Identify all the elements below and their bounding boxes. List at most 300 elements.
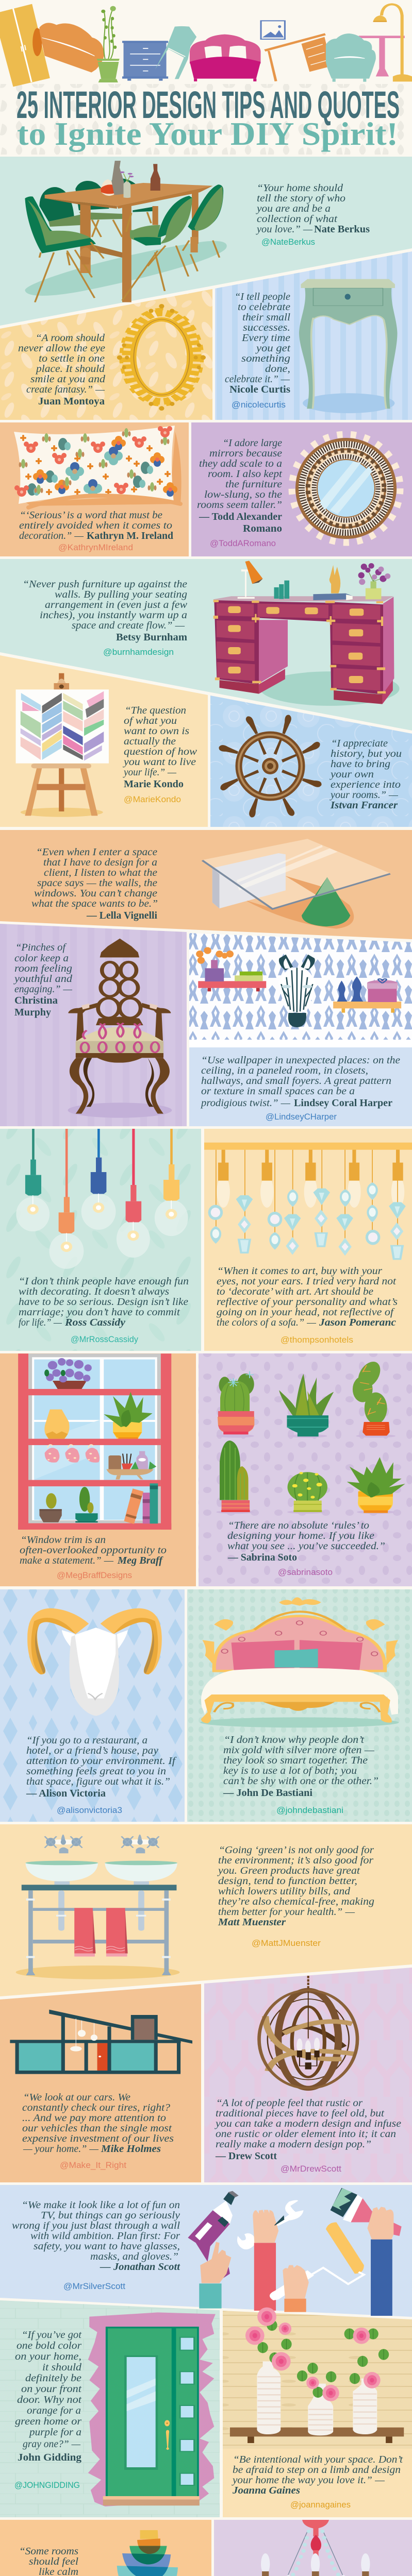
- panel background: [0, 830, 412, 939]
- quote: space says — the walls, the: [37, 877, 157, 889]
- quote: [23, 579, 187, 643]
- quote: — Alison Victoria: [26, 1788, 106, 1799]
- panel background: [0, 655, 208, 827]
- icon: sunburst mirror: [292, 434, 400, 543]
- quote: definitely be: [25, 2372, 81, 2384]
- quote: their small: [242, 312, 290, 323]
- panel: Bunny Williams chandelier: [214, 2520, 412, 2576]
- quote: what the space wants to be.”: [31, 898, 158, 909]
- panel background: [0, 289, 212, 420]
- panel background: [0, 1589, 185, 1822]
- panel: Matt Muenster sinks: [0, 1824, 412, 1996]
- quote: done,: [265, 363, 290, 375]
- panel: Nicole Curtis nightstand: [215, 251, 412, 420]
- icon: drill: [188, 2191, 239, 2278]
- quote: going on in your head, not reflective of: [217, 1307, 395, 1318]
- icon: flower vase shelf: [196, 947, 266, 991]
- quote: actually the: [124, 736, 176, 747]
- quote: “Some rooms: [19, 2546, 78, 2557]
- panel: Mike Holmes modern house: [0, 1984, 201, 2182]
- quote: you are and be a: [256, 203, 331, 214]
- panel: Kathryn M. Ireland pillow: [0, 422, 189, 556]
- icon: paint brush: [331, 2188, 402, 2236]
- panel: Christina Murphy chair: [0, 924, 187, 1126]
- quote: Betsy Burnham: [116, 632, 187, 643]
- icon: yellow lidded pot: [44, 1410, 70, 1439]
- quote: Istvan Francer: [330, 800, 398, 811]
- quote: [329, 738, 402, 811]
- icon: gilded bed: [200, 1597, 399, 1727]
- quote: our vehicles than the single most: [22, 2123, 172, 2134]
- quote: [217, 1844, 374, 1928]
- quote: really make a modern design pop.”: [216, 2139, 371, 2150]
- quote: ... And we pay more attention to: [22, 2112, 166, 2124]
- quote: windows. You can’t change: [34, 888, 157, 899]
- wallpaper background: [189, 933, 412, 1040]
- handle: @KathrynMIreland: [58, 543, 133, 552]
- icon: zebra head: [278, 955, 316, 1027]
- quote: they’re also chemical-free, making: [218, 1896, 374, 1907]
- illustration: dining table set: [25, 161, 227, 302]
- panel background: [199, 1353, 412, 1586]
- quote: Ross Cassidy: [64, 1317, 126, 1328]
- quote: have to bring: [331, 758, 390, 770]
- quote: space and create flow.” —: [72, 620, 185, 631]
- quote: Mike Holmes: [101, 2143, 161, 2155]
- panel background: [0, 924, 187, 1126]
- quote: “Pinches of: [15, 942, 67, 953]
- quote: hotel, or a friend’s house, pay: [26, 1745, 159, 1756]
- quote: prodigious twist.” —: [200, 1097, 291, 1109]
- quote: room. I also kept: [208, 468, 283, 480]
- panel background: [187, 1589, 412, 1822]
- quote: “I tell people: [235, 291, 290, 302]
- quote: entirely avoided when it comes to: [19, 520, 172, 531]
- quote: “Never push furniture up against the: [23, 579, 187, 590]
- quote: [19, 1276, 189, 1328]
- quote: green home or: [15, 2416, 82, 2427]
- quote: your home the way you love it.” —: [232, 2475, 385, 2486]
- quote: to celebrate: [238, 301, 290, 313]
- quote: “The question: [125, 705, 186, 716]
- icon: blue dresser: [122, 41, 168, 81]
- quote: “I appreciate: [331, 738, 388, 749]
- quote: [12, 2199, 180, 2273]
- icon: colorful chandelier: [252, 2520, 378, 2576]
- panel background: [210, 696, 412, 827]
- panel background: [191, 422, 412, 556]
- quote: Murphy: [14, 1007, 52, 1018]
- handle: @MrDrewScott: [281, 2164, 341, 2174]
- quote: [26, 1735, 177, 1799]
- handle: @MegBraffDesigns: [57, 1570, 132, 1580]
- handle: @MarieKondo: [124, 794, 181, 804]
- quote: constantly check our tires, right?: [22, 2102, 171, 2113]
- quote: which lowers utility bills, and: [218, 1886, 351, 1897]
- quote: Joanna Gaines: [232, 2485, 300, 2496]
- quote: “There are no absolute ‘rules’ to: [228, 1520, 369, 1531]
- quote: [20, 1534, 167, 1566]
- quote: the colors of a sofa.” —: [217, 1317, 317, 1328]
- quote: — John De Bastiani: [223, 1787, 312, 1799]
- quote: something: [241, 353, 290, 364]
- panel: Ross Cassidy pendant bulbs: [0, 1129, 201, 1351]
- icon: wrench: [237, 2200, 304, 2249]
- quote: design, tend to function better,: [218, 1875, 357, 1887]
- panel background: [0, 559, 412, 731]
- header: title area: [0, 4, 412, 155]
- quote: “I don’t know why people don’t: [224, 1734, 365, 1745]
- quote: “A lot of people feel that rustic or: [216, 2097, 363, 2109]
- handle: @MrRossCassidy: [71, 1334, 138, 1344]
- icon: easel with chevron painting: [16, 673, 109, 817]
- icon: floor lamp: [373, 4, 412, 81]
- quote: John Gidding: [18, 2452, 82, 2463]
- panel background: [0, 1984, 201, 2182]
- quote: collection of what: [257, 213, 338, 225]
- quote: place. It should: [35, 363, 105, 375]
- quote: rooms seem taller.”: [197, 499, 282, 511]
- quote: of what you: [124, 715, 177, 726]
- quote: successes.: [243, 322, 290, 333]
- quote: question of how: [124, 746, 197, 757]
- icon: mint armchair: [326, 33, 376, 82]
- quote: or texture in small spaces can be a: [201, 1086, 355, 1097]
- panel: Jonathan Scott tools: [0, 2185, 412, 2317]
- quote: your life.” —: [123, 767, 177, 778]
- panel background: [0, 2185, 412, 2317]
- handle: @sabrinasoto: [278, 1567, 333, 1577]
- quote: orange for a: [27, 2405, 81, 2416]
- quote: decoration.” —: [19, 530, 84, 541]
- panel: Todd Alexander Romano round mirror: [191, 422, 412, 556]
- quote: [19, 510, 174, 541]
- quote: smile at you and: [30, 374, 106, 385]
- quote: it should: [42, 2362, 82, 2373]
- handle: @ToddARomano: [210, 538, 276, 548]
- quote: Nicole Curtis: [229, 384, 290, 395]
- panel background: [0, 2520, 211, 2576]
- quote: hallways, and small foyers. A great pattern: [201, 1075, 391, 1087]
- panel: John Gidding front door: [0, 2300, 220, 2517]
- panel: John De Bastiani bed: [187, 1589, 412, 1822]
- quote: on your home,: [15, 2351, 81, 2362]
- quote: that space, figure out what it is.”: [26, 1776, 170, 1787]
- quote: “I adore large: [223, 437, 282, 449]
- icon: carved high-back chair: [68, 939, 172, 1118]
- icon: hanging bulbs: [17, 1129, 188, 1269]
- icon: pink bed: [190, 35, 261, 81]
- quote: [232, 2454, 403, 2496]
- panel background: [0, 1129, 201, 1351]
- quote: “I don’t think people have enough fun: [19, 1276, 189, 1287]
- panel: Sabrina Soto cacti: [199, 1353, 412, 1586]
- quote: — Drew Scott: [215, 2150, 277, 2162]
- quote: they add scale to a: [199, 458, 282, 469]
- panel: Jason Pomeranc crystal strands: [204, 1129, 412, 1351]
- quote: experience into: [331, 779, 401, 790]
- quote: eyes, not your ears. I tried very hard not: [217, 1276, 397, 1287]
- handle: @nicolecurtis: [232, 400, 286, 410]
- quote: expensive investment of our lives: [22, 2133, 174, 2144]
- panel: Meg Braff window shelves: [0, 1353, 196, 1586]
- icon: hands holding DIY tools: [188, 2188, 402, 2316]
- panel: Alison Victoria ram head: [0, 1589, 185, 1822]
- quote: reflective of your personality and what’s: [217, 1296, 398, 1308]
- panel background: [0, 157, 412, 326]
- icon: violet planter: [44, 1358, 92, 1389]
- quote: [13, 942, 73, 1018]
- quote: — Todd Alexander: [199, 511, 282, 522]
- title line 2: to Ignite Your DIY Spirit!: [17, 115, 398, 152]
- quote: you get: [255, 343, 291, 354]
- icon: campaign desk: [213, 561, 400, 706]
- icon: glass coffee table: [202, 839, 390, 929]
- quote: create fantasy.” —: [26, 384, 105, 395]
- quote: “When it comes to art, buy with your: [217, 1265, 383, 1277]
- icon: mint chair: [155, 26, 196, 79]
- quote: [256, 182, 370, 235]
- quote: walls. By pulling your seating: [55, 589, 187, 600]
- quote: celebrate it.” —: [225, 374, 290, 385]
- quote: door. Why not: [17, 2394, 82, 2405]
- quote: the environment; it’s also good for: [218, 1855, 374, 1866]
- quote box: [189, 1047, 412, 1126]
- quote: purple for a: [28, 2427, 81, 2438]
- icon: green front door: [88, 2312, 216, 2506]
- icon: crystal chandelier strands: [204, 1143, 412, 1260]
- panel background: [0, 422, 189, 556]
- icon: agave in yellow pot: [104, 1392, 153, 1439]
- quote: inches), you instantly warm up a: [40, 609, 187, 621]
- icon: vases with roses: [230, 2308, 404, 2443]
- quote: with wild ambition. Plan first: For: [30, 2230, 180, 2242]
- quote: make a statement.” —: [20, 1555, 114, 1566]
- quote: “Going ‘green’ is not only good for: [219, 1844, 374, 1856]
- quote: room feeling: [14, 963, 72, 974]
- handle: @MrSilverScott: [63, 2281, 125, 2291]
- icon: window with shelves: [18, 1353, 171, 1530]
- quote: for life.” —: [19, 1317, 62, 1328]
- icon: orange desk: [264, 33, 332, 81]
- quote: Marie Kondo: [124, 778, 184, 790]
- panel background: [0, 2300, 220, 2517]
- quote: something feels great to you in: [26, 1766, 166, 1777]
- quote: [227, 1520, 385, 1563]
- quote: “Your home should: [257, 182, 343, 194]
- wall decor: shelves and zebra head: [196, 947, 401, 1027]
- sink faucet: [45, 1835, 83, 1853]
- panel: Nate Berkus dining table: [0, 157, 412, 326]
- panel: Lella Vignelli glass table: [0, 830, 412, 939]
- quote: Christina: [14, 995, 58, 1006]
- icon: mid-century house: [10, 2010, 192, 2074]
- quote: designing your home. If you like: [227, 1530, 374, 1541]
- quote: your rooms.” —: [329, 789, 399, 801]
- icon: floral pillow: [14, 426, 182, 507]
- icon: double sink vanity: [16, 1835, 180, 1979]
- quote: client, I listen to what the: [44, 867, 157, 878]
- handle: @LindseyCHarper: [266, 1112, 337, 1122]
- panel: Lindsey Coral Harper wallpaper: [189, 933, 412, 1126]
- handle: @NateBerkus: [261, 237, 315, 247]
- quote: [225, 291, 291, 395]
- handle: @MattJMuenster: [252, 1938, 321, 1948]
- quote: can’t be shy with one or the other.”: [223, 1775, 378, 1787]
- icon: orb chandelier: [259, 1976, 357, 2088]
- quote: should feel: [29, 2556, 78, 2567]
- quote: Jason Pomeranc: [319, 1317, 396, 1328]
- quote: your own: [329, 769, 374, 780]
- quote: with decorating. It doesn’t always: [19, 1286, 169, 1297]
- quote: mirrors because: [209, 448, 282, 459]
- quote: “We make it look like a lot of fun on: [22, 2199, 180, 2211]
- quote: Kathryn M. Ireland: [87, 530, 174, 541]
- quote: to settle in one: [39, 353, 105, 364]
- quote: [197, 437, 283, 534]
- quote: [18, 332, 106, 407]
- quote: — Lella Vignelli: [86, 910, 157, 921]
- quote: one rustic or older element into it; it can: [216, 2128, 396, 2140]
- quote: ceiling, in a paneled room, in closets,: [201, 1065, 368, 1076]
- quote: tell the story of who: [257, 193, 345, 204]
- quote: you want to live: [123, 756, 196, 768]
- handle: @johndebastiani: [276, 1805, 343, 1815]
- quote: you can take a modern design and infuse: [215, 2118, 401, 2129]
- quote: [31, 846, 158, 921]
- quote: [17, 2546, 79, 2576]
- quote background: [223, 2449, 412, 2517]
- handle: @joannagaines: [290, 2500, 351, 2510]
- quote: want to own is: [124, 725, 189, 737]
- quote: be afraid to step on a limb and design: [233, 2464, 401, 2476]
- icon: wardrobe: [0, 4, 50, 87]
- handle: @Make_It_Right: [60, 2160, 126, 2170]
- quote: arrangement in (even just a few: [45, 599, 187, 611]
- quote: often-overlooked opportunity to: [20, 1545, 167, 1556]
- quote: you love.” —: [256, 224, 313, 235]
- furniture illustration row: [0, 4, 412, 87]
- quote: [200, 1055, 400, 1109]
- quote: color keep a: [14, 953, 69, 964]
- icon: polka dot mugs: [45, 1448, 100, 1463]
- quote: the furniture: [225, 479, 282, 490]
- icon: nested bowls: [117, 2530, 178, 2576]
- icon: gold ornate mirror: [117, 304, 206, 411]
- icon: chess pieces and hat box shelf: [333, 976, 401, 1013]
- panel background: [214, 2520, 412, 2576]
- quote: Matt Muenster: [218, 1917, 286, 1928]
- quote: on your front: [21, 2383, 82, 2395]
- quote: traditional pieces have to feel old, but: [216, 2108, 385, 2119]
- quote: safety, you want to have glasses,: [34, 2241, 180, 2252]
- quote: [223, 1734, 378, 1799]
- icon: paint roller: [270, 2222, 364, 2300]
- quote: “‘Serious’ is a word that must be: [20, 510, 162, 521]
- quote: [22, 2092, 174, 2155]
- quote: — Jonathan Scott: [100, 2261, 180, 2273]
- quote: never allow the eye: [18, 343, 105, 354]
- quote: Juan Montoya: [38, 396, 105, 407]
- icon: framed picture: [261, 21, 285, 39]
- icon: mint nightstand: [299, 279, 398, 413]
- handle: @thompsonhotels: [281, 1335, 353, 1345]
- panel: Marie Kondo easel: [0, 655, 208, 827]
- icon: books: [124, 1483, 158, 1524]
- handle: @alisonvictoria3: [57, 1805, 122, 1815]
- quote: have to be so serious. Design isn’t like: [19, 1296, 188, 1308]
- quote: what you see ... you’ve succeeded.”: [227, 1540, 385, 1552]
- panel: Drew Scott orb chandelier: [204, 1968, 412, 2182]
- icon: pink side table: [359, 36, 405, 76]
- panel background: [204, 1968, 412, 2182]
- quote: engaging.” —: [14, 984, 73, 995]
- quote: “We look at our cars. We: [23, 2092, 130, 2103]
- quote: “Even when I enter a space: [36, 846, 157, 858]
- quote: “If you’ve got: [22, 2329, 82, 2341]
- quote: them better for your health.” —: [218, 1906, 355, 1918]
- icon: tray with candle and diffuser: [106, 1451, 156, 1480]
- icon: ship wheel: [217, 713, 323, 819]
- quote: mix gold with silver more often —: [223, 1744, 375, 1756]
- icon: small cacti in pots: [39, 1487, 98, 1522]
- panel background: [0, 1353, 196, 1586]
- quote: they look so smart together. The: [223, 1755, 368, 1766]
- icon: potted plant: [97, 6, 120, 82]
- white gap: [189, 1040, 412, 1047]
- panel: Istvan Francer ship wheel: [210, 696, 412, 827]
- panel: Juan Montoya mirror: [0, 289, 212, 420]
- panel background: [215, 251, 412, 420]
- handle: @burnhamdesign: [103, 647, 174, 657]
- quote: [123, 705, 197, 790]
- quote: [217, 1265, 398, 1328]
- quote: [215, 2097, 401, 2162]
- panel background: [204, 1129, 412, 1351]
- quote: youthful and: [13, 973, 73, 985]
- quote: low-slung, so the: [204, 489, 282, 500]
- icon: sofa: [32, 23, 104, 73]
- icon: ram skull: [27, 1608, 162, 1716]
- quote: to ‘decorate’ with art. Art should be: [217, 1286, 373, 1297]
- wood wall background: [223, 2311, 412, 2449]
- quote: wrong if you just blast through a wall: [12, 2220, 180, 2231]
- quote: “If you go to a restaurant, a: [26, 1735, 147, 1746]
- panel: Joanna Gaines vases: [223, 2308, 412, 2517]
- quote: you. Green products have great: [217, 1865, 360, 1876]
- quote: gray one?” —: [23, 2438, 81, 2450]
- quote: history, but you: [331, 748, 402, 759]
- quote: — Sabrina Soto: [227, 1552, 297, 1563]
- panel: Betsy Burnham desk: [0, 559, 412, 731]
- quote: Meg Braff: [117, 1555, 163, 1566]
- quote: “Use wallpaper in unexpected places: on the: [201, 1055, 400, 1066]
- quote: marriage; you don’t have to commit: [19, 1307, 180, 1318]
- quote: Nate Berkus: [314, 224, 370, 235]
- quote: Romano: [243, 523, 282, 534]
- quote: “Be intentional with your space. Don’t: [233, 2454, 403, 2465]
- quote: “Window trim is an: [21, 1534, 106, 1546]
- quote: — your home.” —: [23, 2143, 99, 2155]
- quote: masks, and gloves.”: [90, 2251, 178, 2262]
- quote: Every time: [241, 332, 290, 344]
- quote: Lindsey Coral Harper: [294, 1097, 392, 1109]
- icon: potted cacti and succulents: [216, 1360, 405, 1514]
- quote: key is to use a lot of both; you: [223, 1765, 357, 1776]
- quote: that I have to design for a: [43, 857, 157, 868]
- damask pattern band: [0, 84, 412, 155]
- panel background: [0, 1824, 412, 1996]
